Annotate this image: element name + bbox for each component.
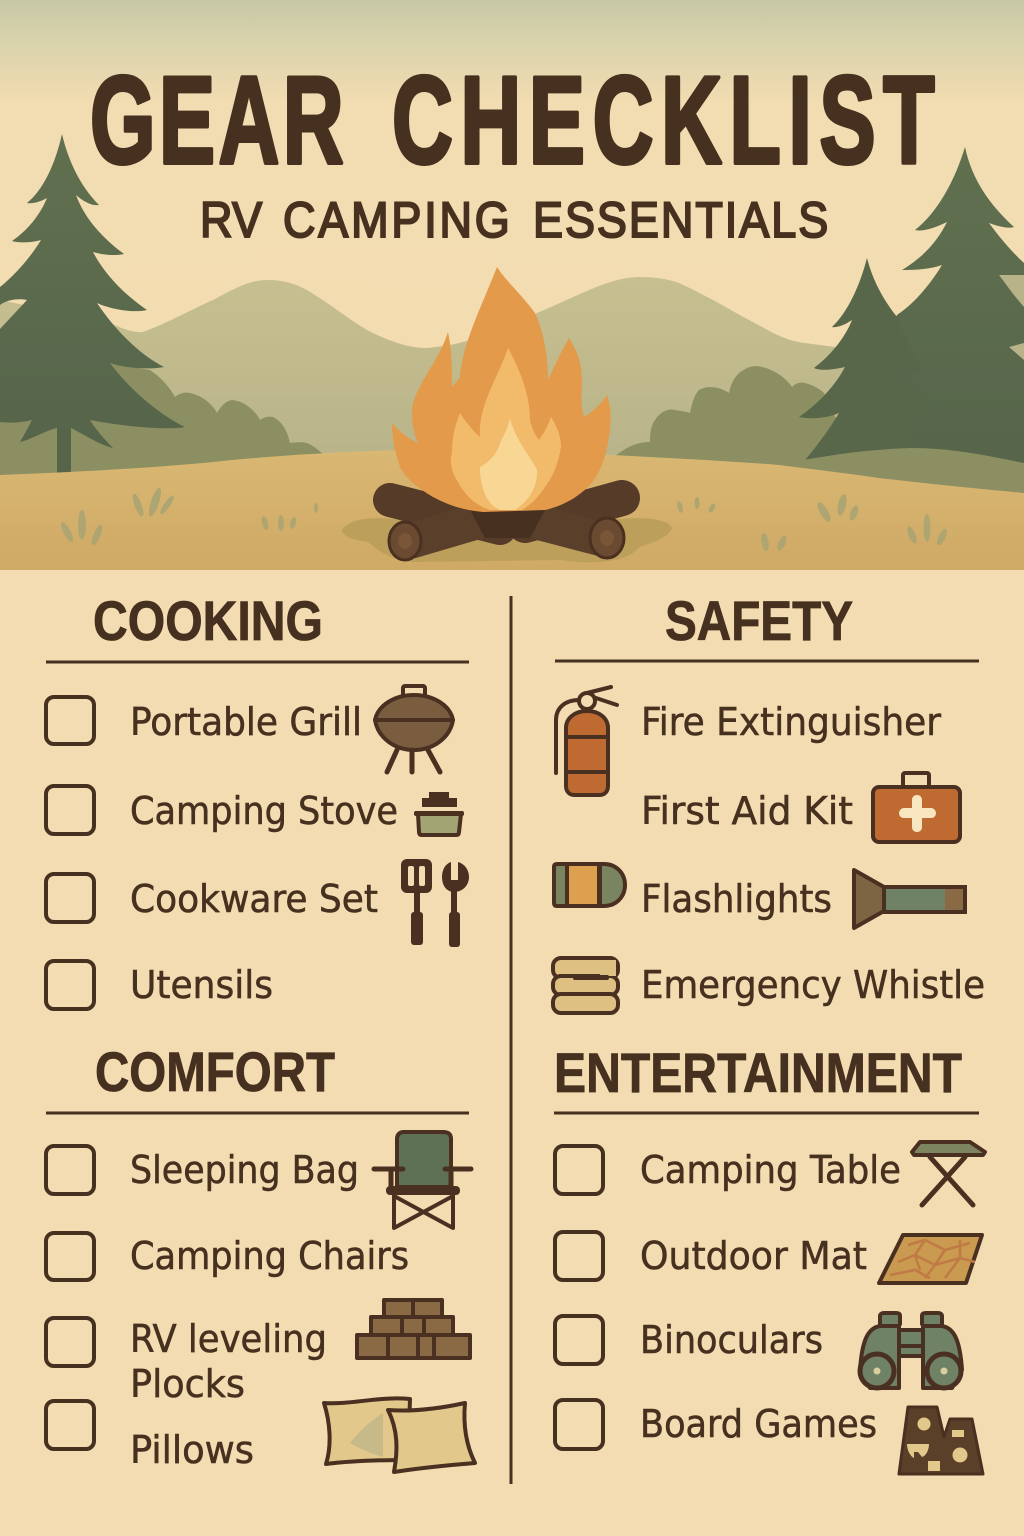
icon: folded blankets (553, 958, 618, 1013)
icon: binoculars (860, 1313, 962, 1388)
item: rv leveling blocks: RV leveling (130, 1317, 327, 1361)
panel: cooking (46, 589, 469, 1009)
icon: camping chair (374, 1132, 471, 1228)
title (90, 52, 935, 190)
green rise right (792, 448, 1024, 500)
panel: safety (553, 589, 985, 1013)
item: board games (555, 1400, 877, 1449)
grass tufts (59, 486, 949, 552)
icon: board game pieces (899, 1407, 983, 1474)
icon: grill (375, 686, 453, 772)
hills (0, 277, 900, 470)
item: binoculars (555, 1316, 823, 1364)
item: outdoor mat: Outdoor Mat (640, 1234, 867, 1278)
heading: comfort: COMFORT (95, 1040, 335, 1103)
icon: flashlight (854, 870, 965, 928)
item: cookware set (46, 874, 378, 922)
item: portable grill (46, 697, 362, 744)
item: pillows (46, 1401, 254, 1472)
outer flame (392, 267, 611, 512)
item: emergency whistle: Emergency Whistle (641, 963, 985, 1007)
item: camping stove: Camping Stove (130, 789, 398, 833)
item: utensils (46, 961, 273, 1009)
item: portable grill: Portable Grill (130, 700, 362, 744)
item: sleeping bag: Sleeping Bag (130, 1148, 359, 1192)
logs (390, 498, 622, 541)
item: outdoor mat (555, 1232, 867, 1280)
tree: far right large (820, 147, 1024, 480)
subtitle: CAMPING (283, 193, 510, 249)
log ends (389, 518, 624, 560)
item: camping table: Camping Table (640, 1148, 901, 1192)
item: utensils: Utensils (130, 963, 273, 1007)
panel: comfort (46, 1040, 475, 1472)
item: fire extinguisher: Fire Extinguisher (641, 700, 942, 744)
panel: entertainment (554, 1041, 985, 1474)
item: rv leveling blocks: Plocks (130, 1362, 245, 1406)
inner flame (480, 418, 537, 510)
bushes right (615, 366, 860, 470)
heading: safety: SAFETY (665, 589, 853, 652)
icon: spatula and fork (401, 859, 469, 947)
icon: outdoor mat (879, 1235, 982, 1283)
heading: cooking: COOKING (93, 589, 323, 652)
subtitle: ESSENTIALS (533, 193, 828, 249)
subtitle (200, 193, 828, 249)
icon: leveling blocks (357, 1300, 470, 1358)
ground (0, 450, 1024, 570)
heading: entertainment: ENTERTAINMENT (554, 1041, 962, 1104)
middle flame (451, 348, 561, 510)
tree: left (0, 134, 185, 476)
item: camping chairs: Camping Chairs (130, 1234, 409, 1278)
item: board games: Board Games (640, 1402, 877, 1446)
item: pillows: Pillows (130, 1428, 254, 1472)
log shadow (342, 518, 672, 562)
item: camping table (555, 1146, 901, 1194)
subtitle: RV (200, 193, 262, 249)
tree: right small (797, 258, 942, 470)
icon: campfire (342, 267, 672, 562)
icon: camping table (912, 1142, 985, 1205)
column divider (510, 596, 512, 1484)
item: cookware set: Cookware Set (130, 877, 378, 921)
icon: stove (414, 792, 464, 835)
icon: sleeping bag roll (554, 864, 625, 906)
item: binoculars: Binoculars (640, 1318, 823, 1362)
item: first aid kit: First Aid Kit (641, 789, 853, 833)
title: GEAR (90, 52, 344, 190)
item: camping stove (46, 786, 398, 834)
item: sleeping bag (46, 1146, 359, 1194)
bushes left (0, 363, 322, 480)
icon: pillows (324, 1398, 475, 1472)
icon: fire extinguisher (556, 687, 617, 795)
icon: first aid kit (873, 773, 960, 842)
panel: campfire landscape header (0, 0, 1024, 570)
item: flashlights: Flashlights (641, 877, 832, 921)
title: CHECKLIST (392, 52, 935, 190)
item: rv leveling blocks (46, 1317, 327, 1406)
